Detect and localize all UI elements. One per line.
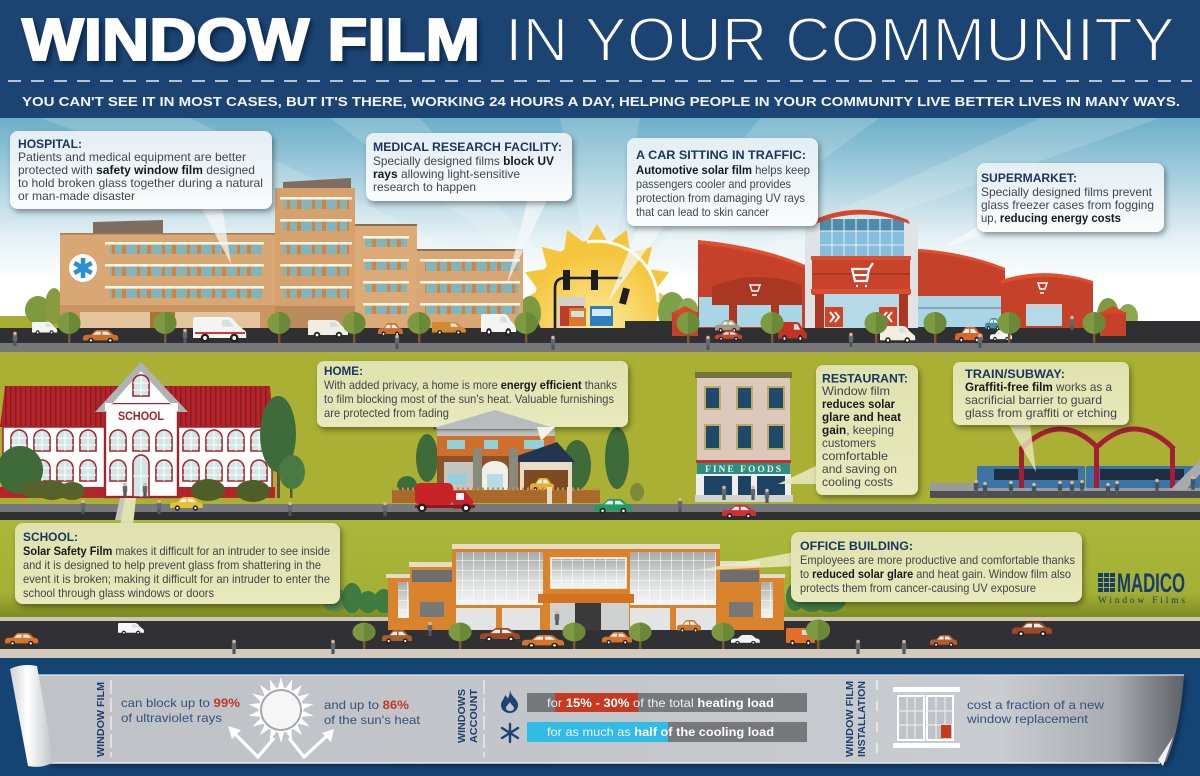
callout: train subway: glass from graffiti or etching	[965, 406, 1117, 420]
school trees and bushes	[0, 396, 305, 502]
sign: FINE FOODS	[705, 465, 781, 475]
callout: train subway: Graffiti-free film works as a	[965, 380, 1112, 394]
callout: school: SCHOOL:	[23, 530, 78, 544]
restaurant	[695, 372, 793, 502]
callout: car in traffic: that can lead to skin cancer	[636, 205, 769, 219]
subtitle: YOU CAN'T SEE IT IN MOST CASES, BUT IT'S THERE, WORKING 24 HOURS A DAY, HELPING PEOPLE IN YOUR COMMUNITY LIVE BETTER LIVES IN MANY WAYS.	[22, 94, 1180, 109]
cars row 1	[32, 314, 1012, 343]
callout: school: school through glass windows or doors	[23, 586, 214, 600]
footer band	[0, 658, 1200, 776]
callout: supermarket	[940, 163, 1164, 249]
section label: window film installation	[845, 680, 877, 757]
school building: SCHOOL	[118, 409, 164, 423]
callout: medical research facility: Specially designed films block UV	[373, 154, 554, 168]
callout: supermarket: glass freezer cases from fogging	[981, 198, 1154, 212]
callout: supermarket: SUPERMARKET:	[981, 171, 1077, 185]
callout: restaurant: comfortable	[822, 449, 888, 463]
right wing	[918, 249, 1005, 296]
callout: restaurant	[778, 365, 918, 495]
logo: Madico Window Films	[1098, 568, 1185, 606]
banner ribbon	[10, 665, 1184, 767]
center tower	[805, 222, 918, 328]
vehicles row 2	[170, 483, 756, 519]
house	[392, 410, 644, 504]
title	[22, 6, 1175, 75]
callout: home: HOME:	[324, 364, 363, 378]
cars row 3	[5, 620, 1052, 648]
left wing	[698, 240, 805, 328]
people row 1	[13, 316, 1074, 350]
body text: to hold broken glass together during a natural	[18, 176, 263, 190]
icon: sun with reflected arrows	[228, 677, 334, 757]
stat: cost a fraction: cost a fraction of a new	[967, 698, 1104, 712]
fence	[392, 490, 600, 503]
callout: car in traffic: passengers cooler and provides	[636, 177, 791, 191]
back road behind supermarket	[625, 321, 1200, 329]
icon: flame	[501, 690, 518, 713]
heating load bar: for 15% - 30% of the total heating load	[547, 696, 774, 710]
sun	[519, 224, 675, 364]
callout: car in traffic: Automotive solar film helps keep	[636, 163, 810, 177]
callout: home: to film blocking most of the sun's heat. Valuable furnishings	[324, 392, 614, 406]
callout: office building: to reduced solar glare and heat gain. Window film also	[800, 567, 1071, 581]
green field row 2	[0, 352, 1200, 504]
callout: supermarket: Specially designed films prevent	[981, 185, 1153, 199]
icon: cart small	[750, 285, 760, 295]
icon: star of life	[69, 254, 97, 282]
callout: office building: protects them from cancer-causing UV exposure	[800, 581, 1036, 595]
stat: 99 percent ultraviolet: of ultraviolet rays	[121, 711, 222, 725]
callout: supermarket: up, reducing energy costs	[981, 211, 1121, 225]
callout: train subway: sacrificial barrier to guard	[965, 393, 1102, 407]
train station	[930, 429, 1200, 498]
left curl	[10, 665, 54, 767]
green field row 3	[0, 520, 1200, 617]
office hedges	[322, 583, 846, 613]
callout: office building: Employees are more productive and comfortable thanks	[800, 553, 1075, 567]
callout: train subway	[953, 362, 1129, 472]
office building	[386, 544, 785, 630]
stat: cost a fraction: window replacement	[966, 712, 1089, 726]
background trees row 1	[25, 288, 1138, 332]
section label: window film installation: INSTALLATION	[857, 681, 868, 757]
olive horizon band	[0, 316, 60, 329]
trees row 3	[352, 620, 830, 649]
traffic light	[555, 270, 630, 328]
callout: school: Solar Safety Film makes it difficult for an intruder to see inside	[23, 544, 330, 558]
stat: 86 percent heat: of the sun's heat	[324, 713, 421, 727]
right corner fold	[1158, 737, 1173, 766]
truck	[415, 483, 475, 512]
cooling load bar: for as much as half of the cooling load	[547, 725, 774, 739]
callout: restaurant: and saving on	[822, 462, 897, 476]
road row 3	[0, 617, 1200, 658]
section label: windows account: ACCOUNT	[469, 689, 480, 743]
callout: medical research facility: MEDICAL RESEARCH FACILITY:	[373, 140, 562, 154]
callout: school	[15, 498, 340, 604]
callout: restaurant: gain, keeping	[822, 423, 894, 437]
heading: HOSPITAL:	[18, 137, 82, 151]
callout: car in traffic: protection from damaging UV rays	[636, 191, 805, 205]
roof	[0, 386, 273, 427]
callout: restaurant: reduces solar	[822, 397, 895, 411]
road row 2	[0, 498, 1200, 520]
lower windows	[34, 460, 50, 481]
road row 1	[0, 328, 1200, 352]
callout: restaurant: Window film	[822, 384, 890, 398]
stat: 99 percent ultraviolet: can block up to 99%	[121, 696, 240, 710]
section label: windows account	[457, 680, 484, 757]
callout: restaurant: RESTAURANT:	[822, 372, 908, 386]
body text: or man-made disaster	[18, 189, 135, 203]
stat: 86 percent heat: and up to 86%	[324, 698, 409, 712]
people row 3	[232, 611, 906, 654]
callout: school: and it is designed to help prevent glass from shattering in the	[23, 558, 321, 572]
trees row 1	[58, 312, 1106, 343]
section label: window film	[96, 680, 111, 757]
kiosks	[670, 306, 1128, 336]
callout: medical research facility: rays allowing light-sensitive	[373, 167, 520, 181]
school building	[0, 362, 275, 498]
section label: window film: WINDOW FILM	[96, 682, 107, 757]
section label: windows account: WINDOWS	[457, 689, 468, 743]
callout: hospital	[10, 131, 272, 264]
title: IN YOUR COMMUNITY	[505, 6, 1175, 75]
callout: home: With added privacy, a home is more energy efficient thanks	[324, 378, 617, 392]
background: sky	[0, 118, 1200, 323]
background: header band	[0, 0, 1200, 118]
callout: car in traffic	[608, 138, 818, 302]
callout: medical research facility: research to happen	[373, 180, 476, 194]
callout: medical research facility	[366, 133, 572, 284]
hospital	[60, 178, 523, 330]
people on platform	[974, 476, 1195, 497]
icon: cart	[851, 263, 873, 286]
body text: protected with safety window film designed	[18, 163, 255, 177]
title: WINDOW FILM	[22, 7, 480, 73]
callout: office building: OFFICE BUILDING:	[800, 539, 913, 553]
supermarket	[698, 210, 1093, 330]
section label: window film installation: WINDOW FILM	[845, 681, 856, 757]
stat: 99 percent ultraviolet	[121, 696, 240, 725]
callout: home: are protected from fading	[324, 406, 449, 420]
callout: train subway: TRAIN/SUBWAY:	[965, 367, 1065, 381]
people row 2	[81, 483, 769, 516]
callout: restaurant: glare and heat	[822, 410, 901, 424]
upper windows	[11, 430, 27, 451]
callout: restaurant: customers	[822, 436, 876, 450]
body text	[18, 150, 263, 203]
callout: school: event it is broken; making it difficult for an intruder to enter the	[23, 572, 330, 586]
stat: cost a fraction	[966, 698, 1104, 726]
stat: 86 percent heat	[324, 698, 421, 727]
right small store	[1001, 273, 1093, 328]
heating load bar	[527, 693, 807, 712]
logo: Madico Window Films: Window Films	[1098, 596, 1185, 606]
body text: Patients and medical equipment are better	[18, 150, 246, 164]
callout: restaurant: cooling costs	[822, 475, 893, 489]
cooling load bar	[527, 722, 807, 742]
callout: car in traffic: A CAR SITTING IN TRAFFIC:	[636, 148, 806, 162]
icon: snowflake	[502, 724, 518, 742]
icon: window	[893, 687, 960, 748]
callout: office building	[692, 532, 1082, 602]
vehicles at light	[558, 297, 613, 327]
callout: home	[317, 361, 628, 441]
